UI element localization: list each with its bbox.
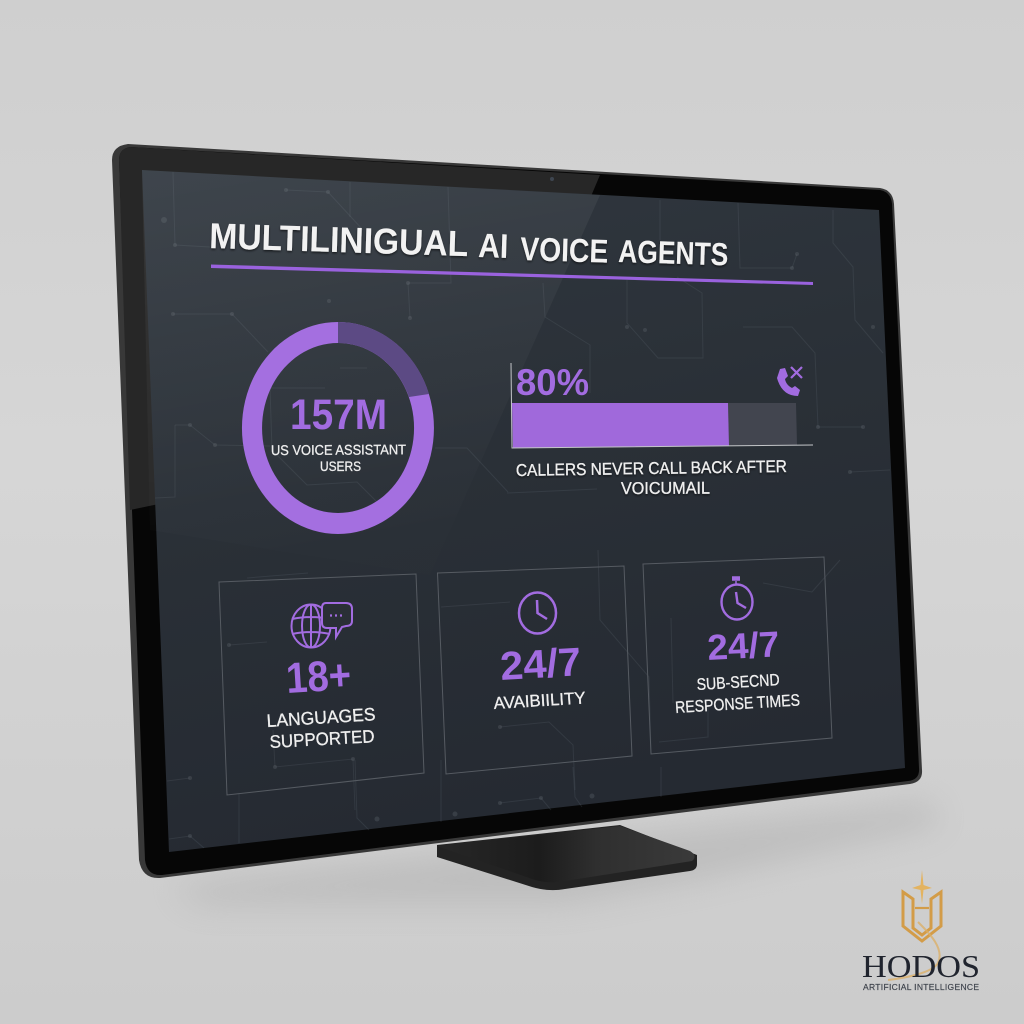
logo wordmark: HODOS	[862, 948, 980, 984]
availability label: AVAIBIILITY	[493, 688, 586, 713]
languages label	[266, 704, 376, 752]
response label: RESPONSE TIMES	[675, 691, 801, 717]
title	[209, 215, 729, 272]
bar fill	[512, 403, 729, 448]
logo tagline: ARTIFICIAL INTELLIGENCE	[863, 982, 979, 992]
availability value: 24/7	[499, 640, 582, 689]
bar axes	[511, 363, 813, 448]
donut label: USERS	[320, 458, 361, 474]
bar label	[516, 457, 787, 498]
title underline	[211, 264, 813, 285]
availability card border	[438, 566, 632, 774]
monitor stand	[437, 825, 697, 890]
bar label: VOICUMAIL	[621, 479, 710, 498]
monitor frame	[112, 144, 922, 878]
donut chart: 157M US voice assistant users	[242, 322, 434, 534]
icon: stopwatch	[722, 578, 752, 620]
donut remaining segment	[338, 322, 429, 397]
screen glare	[142, 170, 600, 575]
title: MULTILINIGUAL	[209, 215, 469, 264]
logo emblem	[888, 892, 941, 980]
bar value: 80%	[516, 362, 589, 403]
languages value: 18+	[285, 651, 352, 703]
title: AI	[478, 227, 509, 266]
circuit background pattern	[155, 172, 890, 848]
screen	[142, 170, 905, 852]
bar chart: 80% callers	[511, 362, 813, 498]
response label: SUB-SECND	[696, 671, 780, 694]
donut label	[271, 441, 406, 474]
logo: Hodos	[862, 870, 980, 992]
response card border	[643, 557, 832, 754]
monitor shadow	[170, 800, 940, 905]
languages card border	[219, 574, 424, 795]
donut ring	[242, 322, 434, 534]
bar track	[728, 403, 797, 446]
panel: languages	[219, 574, 424, 795]
panel: response times	[643, 557, 832, 754]
donut label: US VOICE ASSISTANT	[271, 441, 406, 458]
logo star	[912, 870, 932, 904]
title: AGENTS	[618, 233, 729, 272]
icon: globe with speech bubble	[292, 603, 352, 648]
bar label: CALLERS NEVER CALL BACK AFTER	[516, 457, 787, 480]
title: VOICE	[520, 230, 609, 270]
panel: availability	[438, 566, 632, 774]
languages label: LANGUAGES	[266, 704, 376, 731]
donut value: 157M	[290, 391, 387, 439]
response value: 24/7	[706, 623, 780, 668]
icon: clock	[519, 592, 556, 634]
response label	[675, 671, 801, 717]
icon: phone missed call	[777, 367, 802, 396]
languages label: SUPPORTED	[269, 726, 375, 752]
